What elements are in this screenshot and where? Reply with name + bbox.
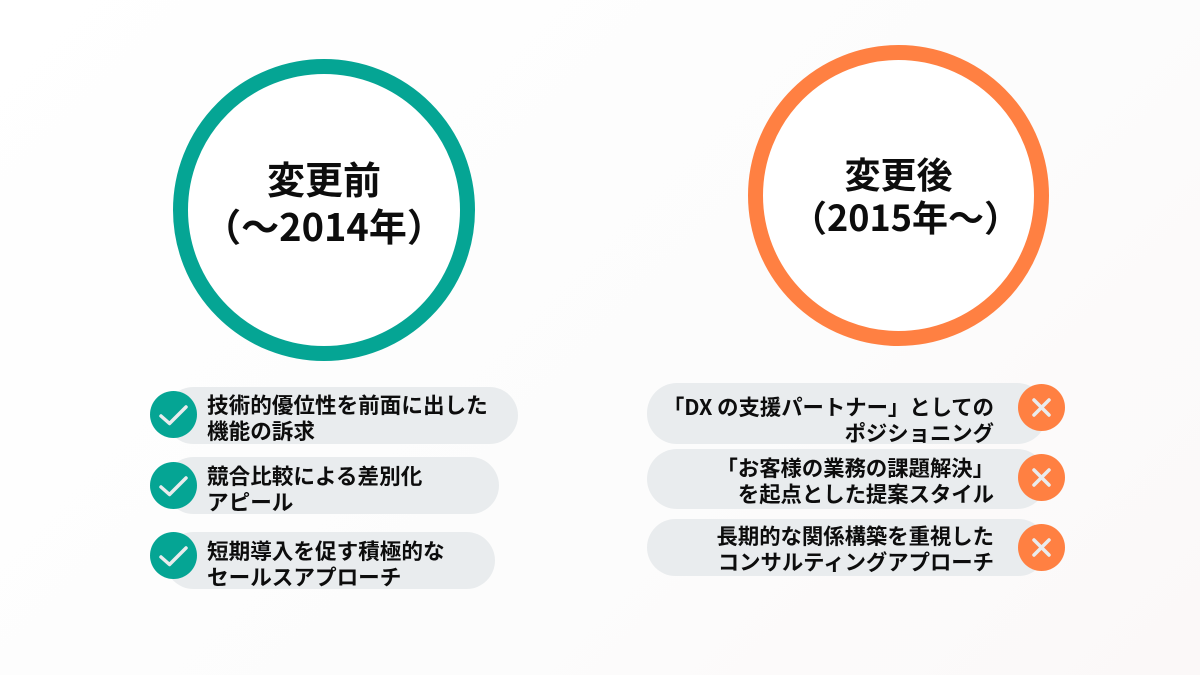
item text: アピール xyxy=(207,486,293,517)
item: short-term adoption xyxy=(150,532,495,592)
heading: after xyxy=(791,147,1020,242)
item: competitive comparison xyxy=(150,457,499,517)
heading: before xyxy=(203,150,445,252)
pill background xyxy=(165,387,518,444)
circle: before xyxy=(173,59,475,361)
pill background xyxy=(647,519,1047,576)
item text xyxy=(663,391,994,448)
item text xyxy=(717,452,994,509)
pill background xyxy=(165,457,499,514)
heading: after: （2015年～） xyxy=(791,190,1020,242)
item text: 競合比較による差別化 xyxy=(207,460,422,491)
heading: after: 変更後 xyxy=(844,147,952,199)
item: customer issue xyxy=(647,449,1065,509)
icon: cross xyxy=(1018,454,1065,501)
icon: check xyxy=(150,532,197,579)
item text: 機能の訴求 xyxy=(207,415,315,446)
panel: before xyxy=(150,59,518,592)
item text: 「DX の支援パートナー」としての xyxy=(663,391,994,422)
heading: before: 変更前 xyxy=(267,150,381,205)
item text: 短期導入を促す積極的な xyxy=(207,535,445,566)
item text: 長期的な関係構築を重視した xyxy=(717,520,994,551)
icon: cross xyxy=(1018,384,1065,431)
heading: before: （～2014年） xyxy=(203,197,445,252)
item: technical superiority xyxy=(150,387,518,446)
item text xyxy=(717,520,994,576)
item text: 技術的優位性を前面に出した xyxy=(207,389,488,420)
item text xyxy=(207,389,488,446)
item: DX partner xyxy=(647,383,1065,448)
item text: 「お客様の業務の課題解決」 xyxy=(717,452,994,483)
item: long-term relationships xyxy=(647,519,1065,576)
item text xyxy=(207,460,422,517)
pill background xyxy=(647,383,1047,444)
circle: after xyxy=(748,45,1049,346)
pill background xyxy=(647,449,1047,509)
item text: ポジショニング xyxy=(845,416,994,448)
item text: コンサルティングアプローチ xyxy=(718,546,994,576)
icon: check xyxy=(150,462,197,509)
item text xyxy=(207,535,445,592)
icon: check xyxy=(150,391,197,438)
pill background xyxy=(165,532,495,589)
icon: cross xyxy=(1018,524,1065,571)
item text: を起点とした提案スタイル xyxy=(738,478,994,509)
item text: セールスアプローチ xyxy=(207,561,401,592)
panel: after xyxy=(647,45,1065,576)
